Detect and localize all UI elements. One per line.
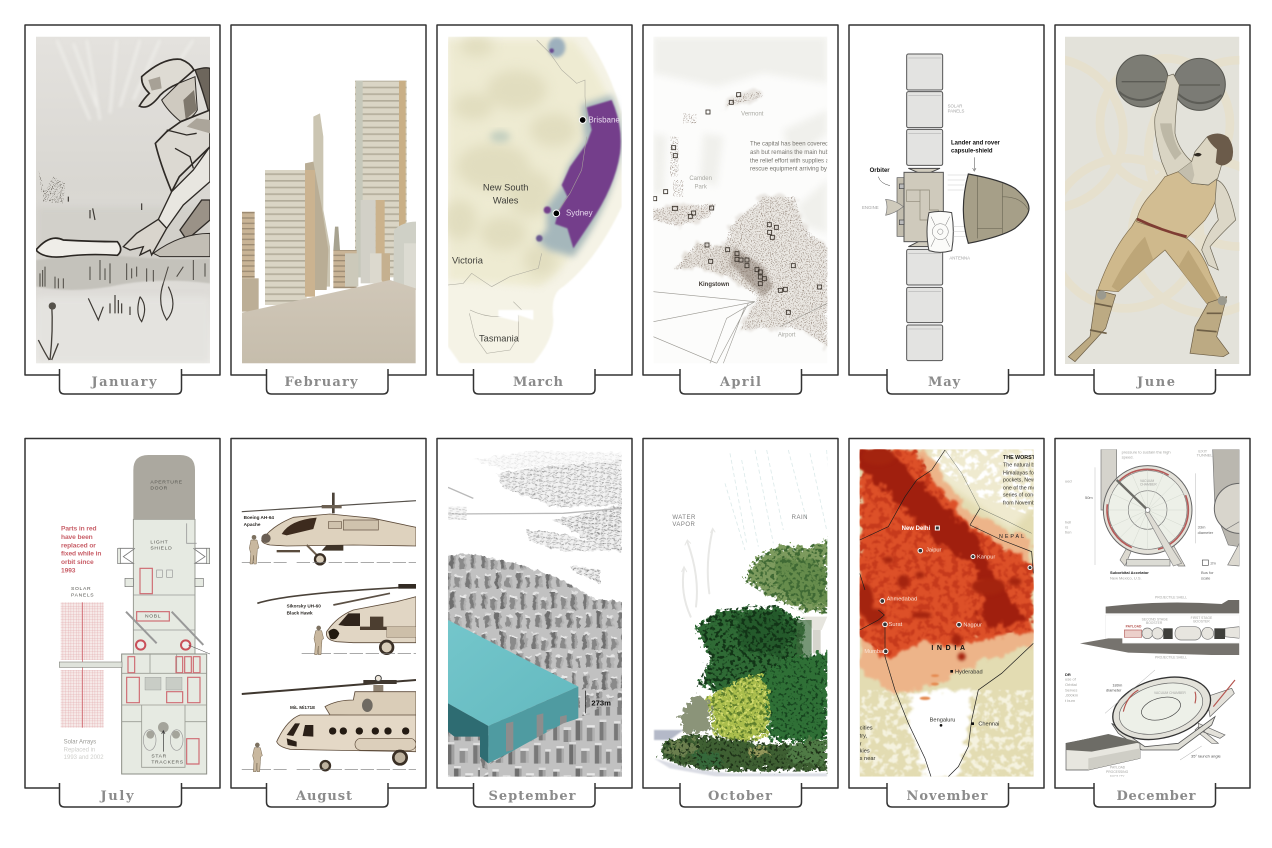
illustration: water volume over a city, 273m deep: 273m: [591, 698, 611, 707]
illustration: strongman lifting a dumbbell: [1065, 36, 1240, 364]
labels: VAPOR: [672, 522, 696, 528]
labels: Orbital: [1065, 682, 1077, 687]
diagram: Hubble telescope: Replaced in: [64, 747, 95, 753]
depth marker: [585, 690, 586, 714]
labels: [862, 104, 970, 260]
card frame: [849, 25, 1044, 394]
diagram: Hubble telescope: 1993: [61, 567, 76, 574]
helicopter: Apache: [242, 493, 416, 564]
map labels: [689, 112, 839, 338]
labels: [71, 479, 184, 766]
month label: March: [513, 375, 564, 390]
labels: rs: [1065, 524, 1068, 529]
antenna: [927, 211, 953, 252]
labels: diameter: [1106, 688, 1122, 693]
diagram: spacecraft with orbiter and capsule: capsule-shield: [951, 148, 993, 154]
foreground buildings: [448, 697, 622, 777]
solar arrays: [61, 602, 104, 660]
text note: pockets, New Delhi: [1003, 478, 1049, 484]
labels: VACUUM: [1140, 479, 1154, 483]
panel: May: [849, 25, 1044, 394]
labels: APERTURE: [150, 479, 183, 485]
helicopter: Black Hawk: [257, 584, 416, 655]
labels: PANELS: [948, 109, 965, 114]
raised arm: [1154, 74, 1192, 176]
map labels: rescue equipment arriving by sea: [750, 167, 839, 173]
grey shrub: [680, 695, 710, 733]
head: [1178, 137, 1225, 185]
labels: ued: [1065, 479, 1072, 484]
panel: June: [973, 25, 1272, 394]
map: air pollution over northern India: NEPAL: [999, 534, 1026, 540]
labels: New Mexico, U.S.: [1110, 575, 1142, 580]
map labels: Camden: [689, 176, 712, 182]
card frame: [643, 438, 838, 807]
lower body: [122, 654, 207, 774]
labels: TRACKERS: [151, 760, 184, 766]
map: smoke plume over south-east Australia: [443, 37, 622, 363]
map labels: Jaipur: [926, 548, 942, 554]
labels: hell: [1065, 519, 1071, 524]
panel: February: [231, 25, 426, 394]
card frame: [643, 25, 838, 394]
month label: December: [1116, 789, 1196, 804]
labels: PAYLOAD: [1126, 624, 1142, 628]
right bush: [763, 653, 827, 740]
star trackers: [158, 722, 169, 733]
diagram: Hubble telescope: Parts in red: [61, 526, 96, 533]
diagram: three helicopters with soldiers for scale: [242, 493, 416, 772]
aperture door: [133, 455, 195, 519]
map labels: Sydney: [566, 208, 593, 217]
labels: LIGHT: [150, 539, 168, 545]
labels: [672, 515, 808, 528]
map: air pollution over northern India: r: [860, 741, 862, 747]
panel: July: [25, 438, 220, 807]
illustration: water volume over a city, 273m deep: [440, 449, 627, 783]
far tree: [812, 629, 821, 654]
map: terrain and damage sites around Kingstown: [653, 37, 839, 363]
panel: January: [25, 25, 220, 394]
labels: ANTENNA: [949, 255, 970, 260]
map labels: Airport: [778, 332, 796, 338]
panel: November: [849, 438, 1062, 807]
month label: February: [284, 375, 358, 390]
labels: pressure to sustain the high: [1122, 449, 1171, 454]
labels: PANELS: [71, 592, 94, 598]
map labels: [864, 526, 995, 655]
map labels: Brisbane: [588, 115, 620, 124]
labels: BOOSTER: [1193, 619, 1210, 623]
suborbital accelerator: [1095, 449, 1264, 566]
illustration: rainforest with water vapor and rain: [653, 449, 830, 777]
map labels: Surat: [889, 622, 903, 628]
labels: t burn: [1065, 698, 1075, 703]
map labels: The capital has been covered in: [750, 142, 835, 148]
map labels: Vermont: [741, 112, 764, 118]
labels: ,000km: [1065, 693, 1079, 698]
labels: FIRST STAGE: [1191, 616, 1213, 620]
map labels: New South: [483, 182, 528, 192]
diagram: spacecraft with orbiter and capsule: [862, 54, 1029, 361]
text note: The natural barrier of the: [1003, 463, 1062, 469]
illustration: skyscrapers behind a sand slope: [242, 80, 416, 364]
labels: FACILITY: [1110, 774, 1125, 778]
diagram: spacecraft with orbiter and capsule: Orbiter: [870, 168, 890, 174]
card frame: [1055, 25, 1250, 394]
month label: July: [100, 789, 134, 804]
dumbbell: [1163, 78, 1180, 86]
solar panels: [907, 54, 943, 361]
labels: TUNNEL: [1197, 453, 1213, 458]
diagram: Hubble telescope: orbit since: [61, 559, 94, 566]
orbital accelerator: [1066, 667, 1235, 770]
labels: VACUUM CHAMBER: [1154, 691, 1186, 695]
month label: April: [719, 375, 761, 390]
panel: December: [1055, 438, 1264, 807]
map: air pollution over northern India: Bengaluru: [930, 717, 955, 723]
labels: Sikorsky UH-60: [287, 604, 321, 609]
labels: PROCESSING: [1106, 770, 1129, 774]
rain: [725, 450, 830, 550]
map: air pollution over northern India: s near: [860, 756, 876, 762]
labels: NOBL: [145, 614, 161, 620]
text note: series of cones: [1003, 493, 1039, 499]
map labels: Park: [695, 184, 707, 190]
labels: speed.: [1122, 455, 1134, 460]
labels: Black Hawk: [287, 611, 313, 616]
labels: SOLAR: [71, 586, 91, 592]
month label: January: [90, 375, 157, 390]
panel: August: [231, 438, 426, 807]
free arm: [1202, 180, 1236, 270]
labels: 50m: [1085, 495, 1093, 500]
labels: Bus for: [1201, 570, 1214, 575]
water volume: [448, 620, 578, 726]
torso: [1137, 172, 1218, 238]
diagram: Hubble telescope: have been: [61, 534, 93, 541]
labels: [244, 515, 321, 710]
panel: October: [643, 438, 838, 807]
diagram: Hubble telescope: fixed while in: [61, 551, 101, 558]
helicopter: Mi-171E: [242, 675, 416, 772]
map labels: Nagpur: [963, 623, 982, 629]
map labels: Kanpur: [977, 554, 995, 560]
labels: tion: [1065, 529, 1071, 534]
month label: September: [488, 789, 576, 804]
upper tube: [133, 519, 195, 654]
engine: [886, 199, 903, 215]
labels: PROJECTILE SHELL: [1155, 595, 1187, 599]
diagram: Hubble telescope: 1993 and 2002: [64, 755, 104, 761]
labels: SOLAR: [948, 104, 962, 109]
vapor arrows: [682, 528, 715, 617]
cities: [880, 526, 1032, 654]
labels: diameter: [1198, 530, 1214, 535]
map: air pollution over northern India: kies: [860, 749, 870, 755]
capsule-shield: [948, 175, 968, 237]
map labels: Wales: [493, 195, 519, 205]
month label: August: [295, 789, 352, 804]
labels: 35° launch angle: [1191, 753, 1222, 758]
labels: use of: [1065, 677, 1077, 682]
labels: STAR: [151, 753, 167, 759]
legs: [1098, 218, 1222, 303]
city blocks: [440, 553, 627, 783]
labels: CHAMBER: [1140, 483, 1157, 487]
boots: [1068, 290, 1116, 362]
labels: EXIT: [1198, 449, 1208, 454]
diagram: suborbital and orbital accelerators with projectile: [1065, 449, 1264, 778]
labels: MiL Mi171E: [290, 705, 315, 710]
map labels: Mumbai: [864, 649, 884, 655]
labels: BOOSTER: [1146, 621, 1163, 625]
labels: 180m: [1112, 683, 1123, 688]
text note: Himalayas forms: [1003, 470, 1043, 476]
map labels: ash but remains the main hub of: [750, 150, 836, 156]
text note: [1003, 455, 1062, 506]
card frame: [25, 25, 220, 394]
map labels: the relief effort with supplies and: [750, 158, 836, 164]
map labels: Ahmedabad: [887, 596, 917, 602]
map labels: New Delhi: [902, 526, 931, 532]
map: air pollution over northern India: try,: [860, 734, 868, 740]
map labels: Victoria: [452, 256, 484, 266]
labels: RAIN: [792, 515, 808, 521]
diagram: Hubble telescope: replaced or: [61, 542, 96, 549]
card frame: [437, 438, 632, 807]
month label: October: [708, 789, 772, 804]
labels: scale: [1201, 575, 1211, 580]
card frame: [25, 438, 220, 807]
map: air pollution over northern India: INDIA: [931, 645, 969, 652]
projectile: [1080, 600, 1239, 655]
card frame: [231, 438, 426, 807]
panel: April: [643, 25, 839, 394]
labels: [1065, 449, 1222, 778]
map: air pollution over northern India: [857, 448, 1062, 777]
labels: 33m: [1198, 525, 1206, 530]
panel: March: [437, 25, 632, 394]
month label: November: [906, 789, 988, 804]
labels: Serves: [1065, 687, 1077, 692]
labels: 2m: [1210, 561, 1217, 566]
labels: Apache: [244, 522, 261, 527]
labels: PROJECTILE SHELL: [1155, 656, 1187, 660]
map: air pollution over northern India: cities: [860, 726, 873, 732]
labels: PAYLOAD: [1110, 766, 1126, 770]
illustration: man crouching at a log in the marsh: [36, 37, 210, 363]
text note: THE WORST HIT: [1003, 455, 1046, 461]
map labels: Kingstown: [699, 282, 730, 288]
card frame: [231, 25, 426, 394]
labels: Boeing AH-64: [244, 515, 274, 520]
diagram: Hubble telescope: Solar Arrays: [64, 740, 96, 746]
mid tree: [695, 607, 803, 692]
damage site markers: [653, 93, 822, 314]
card frame: [849, 438, 1044, 807]
diagram: Hubble telescope: [59, 455, 210, 774]
labels: SHIELD: [150, 545, 172, 551]
text note: from November: [1003, 500, 1040, 506]
map: air pollution over northern India: Hyderabad: [955, 670, 983, 676]
month label: May: [928, 375, 960, 390]
labels: SECOND STAGE: [1142, 618, 1169, 622]
labels: ENGINE: [862, 205, 879, 210]
card frame: [437, 25, 632, 394]
map labels: [452, 115, 620, 344]
diagram: spacecraft with orbiter and capsule: Lander and rover: [951, 141, 1001, 147]
yellow shrub: [708, 675, 768, 742]
labels: DR: [1065, 672, 1071, 677]
map labels: Tasmania: [479, 334, 520, 344]
ground shrubs: [654, 730, 683, 740]
map: air pollution over northern India: Chennai: [978, 722, 999, 728]
card frame: [1055, 438, 1250, 807]
month label: June: [1136, 375, 1175, 390]
panel: September: [437, 438, 632, 807]
orbiter body: [897, 178, 905, 236]
text note: one of the most: [1003, 485, 1040, 491]
labels: Suborbital Accelator: [1110, 570, 1149, 575]
labels: DOOR: [150, 486, 168, 492]
labels: WATER: [672, 515, 696, 521]
